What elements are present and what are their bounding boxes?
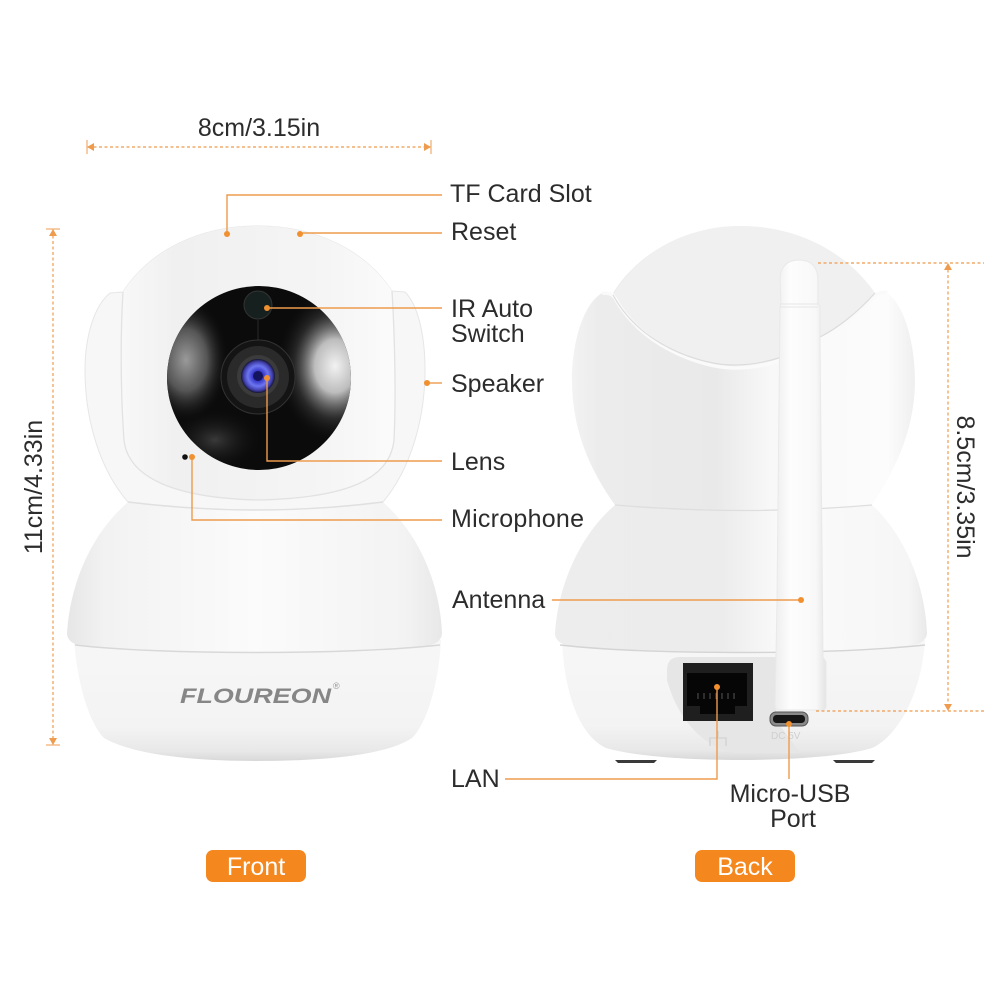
port recess: [667, 657, 800, 753]
IR sensor: [244, 291, 272, 319]
DC 5V label: DC 5V: [771, 731, 801, 742]
callout: LAN: LAN: [451, 765, 500, 793]
callout: TF Card Slot: [224, 180, 592, 237]
callout: Antenna: Antenna: [452, 586, 545, 614]
callout: Reset: Reset: [451, 218, 516, 246]
FLOUREON logo: FLOUREON: [180, 685, 332, 708]
back camera base bowl: [562, 640, 925, 760]
callout: Antenna: [452, 586, 804, 614]
button: Front: [206, 850, 306, 882]
front camera head: [85, 226, 425, 510]
front camera inner plate: [122, 226, 395, 500]
FLOUREON logo: ®: [333, 681, 340, 691]
callout: Microphone: [189, 454, 584, 533]
antenna height dimension: [816, 263, 984, 711]
front camera base bowl: [74, 640, 441, 761]
callout: Microphone: Microphone: [451, 505, 584, 533]
back camera body dome: [555, 505, 927, 653]
width dimension: [87, 114, 431, 154]
front camera body dome: [67, 502, 442, 653]
antenna height dimension: 8.5cm/3.35in: [951, 415, 979, 559]
button: Back: Back: [717, 853, 773, 881]
button: Front: Front: [227, 853, 285, 881]
callout: Lens: [264, 375, 505, 476]
callout: Lens: Lens: [451, 448, 505, 476]
button: Back: [695, 850, 795, 882]
microphone hole: [182, 454, 188, 460]
callout: TF Card Slot: TF Card Slot: [450, 180, 592, 208]
callout: LAN: [451, 684, 720, 793]
callout: IR Auto Switch: Switch: [451, 320, 525, 348]
height dimension: 11cm/4.33in: [20, 420, 48, 554]
micro USB port: [770, 712, 808, 726]
height dimension: [20, 229, 60, 745]
back camera top dome: [613, 226, 875, 365]
LAN icon: [710, 731, 726, 746]
lens: [221, 340, 295, 414]
callout: Micro-USB Port: Port: [770, 805, 816, 833]
callout: Reset: [297, 218, 516, 246]
width dimension: 8cm/3.15in: [198, 114, 320, 142]
antenna: [775, 260, 826, 710]
callout: Micro-USB Port: Micro-USB: [730, 780, 850, 808]
back camera head: [572, 226, 915, 510]
back camera feet: [615, 760, 875, 763]
LAN port: [683, 663, 753, 721]
callout: IR Auto Switch: [264, 295, 533, 348]
callout: IR Auto Switch: IR Auto: [451, 295, 533, 323]
front camera black face: [167, 286, 351, 470]
back camera: [555, 226, 927, 763]
callout: Micro-USB Port: [730, 721, 850, 833]
FLOUREON logo: [180, 681, 340, 708]
callout: Speaker: Speaker: [451, 370, 544, 398]
back camera lip: [602, 292, 887, 368]
front camera: [67, 226, 442, 761]
